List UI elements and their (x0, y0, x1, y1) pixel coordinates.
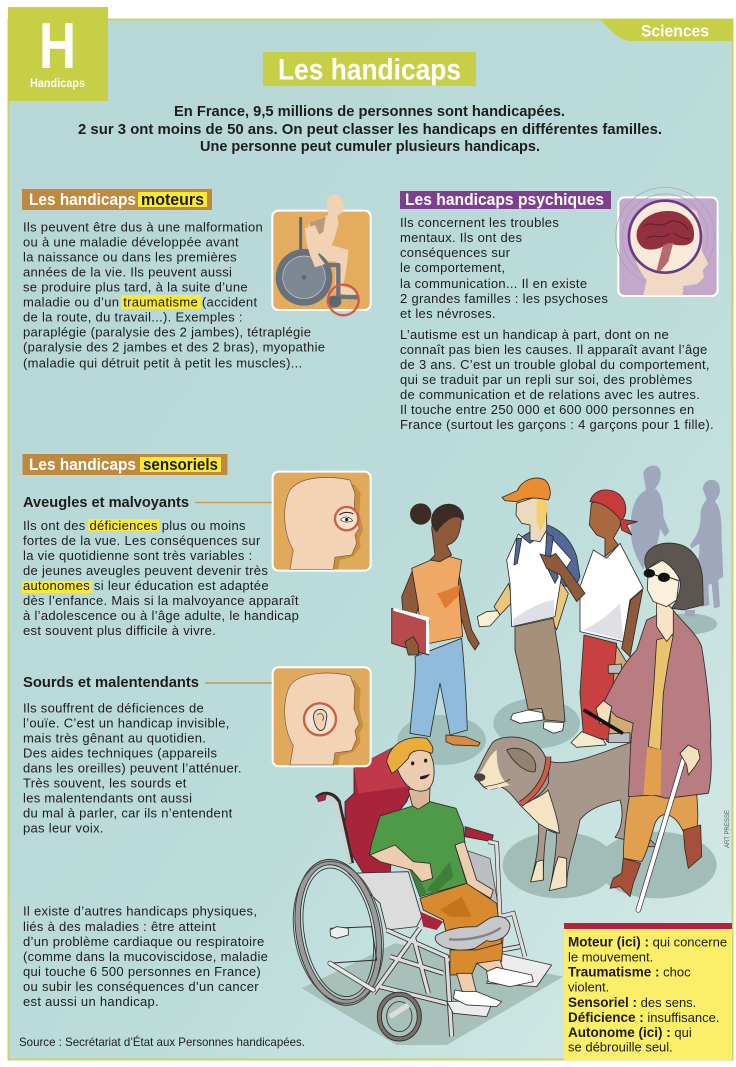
subheading: aveugles et malvoyants: Aveugles et malvoyants (23, 494, 189, 511)
text block: psychiques intro: la communication... Il en existe (400, 276, 587, 291)
text block: moteurs: se produire plus tard, à la suite d’une (23, 280, 248, 294)
text block: moteurs: ou à une maladie développée avant (23, 234, 239, 250)
letter tab: H Handicaps (8, 7, 108, 101)
text block: sourds: Des aides techniques (appareils (23, 746, 217, 760)
text block: aveugles (22, 518, 303, 638)
glossary box: le mouvement. (568, 950, 653, 964)
heading: handicaps psychiques: Les handicaps psychiques (405, 191, 604, 209)
text block: sourds: Très souvent, les sourds et (23, 776, 187, 790)
text block: autisme: qui se traduit par un repli sur soi, des problèmes (400, 372, 693, 387)
person: boy with bandana (540, 490, 643, 747)
text block: sourds: l’ouïe. C’est un handicap invisible, (23, 716, 230, 730)
glossary box: Sensoriel : (568, 995, 637, 1010)
glossary box: Moteur (ici) : (568, 934, 649, 950)
heading: handicaps sensoriels: sensoriels (143, 456, 218, 474)
intro text: Une personne peut cumuler plusieurs handicaps. (200, 138, 540, 155)
text block: autisme: L’autisme est un handicap à part, dont on ne (400, 327, 669, 342)
text block: moteurs: paraplégie (paralysie des 2 jambes), tétraplégie (23, 324, 311, 340)
text block: sourds: Ils souffrent de déficiences de (23, 700, 204, 716)
glossary box: choc (660, 964, 691, 980)
source: Source : Secrétariat d’État aux Personnes handicapées. (19, 1034, 305, 1049)
text block: autisme: France (surtout les garçons : 4 garçons pour 1 fille). (400, 417, 714, 432)
intro text: En France, 9,5 millions de personnes sont handicapées. (174, 103, 565, 120)
person: boy with cap (477, 478, 580, 748)
text block: aveugles: dès l’enfance. Mais si la malvoyance apparaît (23, 593, 299, 608)
text block: aveugles: de jeunes aveugles peuvent devenir très (23, 563, 268, 578)
text block: psychiques intro: mentaux. Ils ont des (400, 230, 523, 245)
heading: handicaps moteurs (22, 189, 212, 210)
text block: moteurs: de la route, du travail...). Exemples : (23, 310, 243, 324)
text block: moteurs: maladie ou d’un traumatisme (accident (23, 294, 257, 310)
text block: psychiques intro: le comportement, (400, 260, 505, 275)
person: girl with book (392, 503, 486, 765)
text block: sourds: dans les oreilles) peuvent l’atténuer. (23, 760, 242, 776)
text block: moteurs: années de la vie. Ils peuvent aussi (23, 264, 232, 280)
text block: aveugles: la vie quotidienne sont très variables : (23, 548, 253, 563)
text block: autisme: Il touche entre 250 000 et 600 000 personnes en (400, 402, 695, 417)
text block: moteurs: (maladie qui détruit petit à petit les muscles)... (23, 356, 302, 370)
section tab: Sciences (600, 19, 733, 41)
frame (373, 928, 552, 1037)
glossary box: qui (671, 1025, 692, 1040)
credit: art presse: ART PRESSE (725, 810, 731, 848)
text block: sourds: les malentendants ont aussi (23, 790, 192, 806)
wheelchair back (317, 747, 525, 957)
glossary box: insuffisance. (644, 1010, 719, 1025)
glossary box: Traumatisme : (568, 964, 660, 980)
heading: handicaps moteurs: Les handicaps (29, 191, 136, 209)
heading: handicaps moteurs: moteurs (141, 191, 204, 209)
intro text: 2 sur 3 ont moins de 50 ans. On peut classer les handicaps en différentes familles. (78, 121, 662, 138)
letter tab: H Handicaps: Handicaps (30, 76, 85, 90)
title: Les handicaps (278, 54, 461, 86)
background silhouettes (631, 465, 723, 635)
text block: autres handicaps: (comme dans la mucoviscidose, maladie (23, 949, 268, 964)
subheading: sourds et malentendants: Sourds et malentendants (23, 674, 199, 691)
text block: aveugles: à l’adolescence ou à l’âge adulte, le handicap (23, 608, 299, 623)
text block: sourds: mais très gênant au quotidien. (23, 730, 206, 746)
text block: aveugles: autonomes si leur éducation est adaptée (23, 578, 269, 593)
boy (369, 738, 533, 1007)
glossary box: se débrouille seul. (568, 1040, 673, 1054)
big wheel (283, 854, 394, 1011)
illustration: guide dog (474, 737, 717, 898)
letter tab: H Handicaps: H (39, 9, 76, 82)
text block: moteurs: Ils peuvent être dus à une malformation (23, 220, 263, 234)
text block: psychiques intro: et les névroses. (400, 306, 496, 321)
text block: autisme: de 3 ans. C’est un trouble global du comportement, (400, 357, 710, 372)
text block: psychiques intro: Ils concernent les troubles (400, 215, 559, 230)
heading: handicaps sensoriels: Les handicaps (29, 456, 136, 474)
small wheel (379, 994, 419, 1039)
text block: moteurs: (paralysie des 2 jambes et des 2 bras), myopathie (23, 340, 325, 354)
text block: psychiques intro: 2 grandes familles : les psychoses (400, 291, 608, 306)
text block: autres handicaps: Il existe d’autres handicaps physiques, (23, 904, 257, 918)
icon: brain in head (616, 187, 718, 296)
icon: head with eye (273, 472, 371, 571)
icon: head with ear (273, 667, 371, 766)
icon: wheelchair user (272, 195, 371, 315)
text block: moteurs: la naissance ou dans les premières (23, 250, 237, 264)
glossary box: qui concerne (649, 934, 727, 950)
glossary box (564, 923, 732, 1060)
text block: aveugles: Ils ont des déficiences plus ou moins (23, 518, 246, 533)
glossary box: violent. (568, 980, 609, 994)
glossary box: des sens. (637, 995, 696, 1010)
heading: handicaps sensoriels (22, 454, 228, 475)
text block: autres handicaps: qui touche 6 500 personnes en France) (23, 964, 261, 979)
text block: autres handicaps: d’un problème cardiaque ou respiratoire (23, 934, 265, 949)
text block: aveugles: est souvent plus difficile à vivre. (23, 623, 216, 638)
floor shadow (302, 943, 563, 1045)
text block: psychiques intro: conséquences sur (400, 245, 511, 260)
text block: aveugles: fortes de la vue. Les conséquences sur (23, 533, 261, 548)
text block: autres handicaps: est aussi un handicap. (23, 994, 159, 1009)
text block: moteurs (23, 220, 329, 370)
illustration: boy in wheelchair (283, 738, 563, 1045)
glossary box: Autonome (ici) : (568, 1025, 671, 1040)
person: blind woman with cane (585, 543, 711, 910)
illustration: crowd (392, 465, 723, 765)
text block: autres handicaps: ou subir les conséquences d’un cancer (23, 979, 259, 994)
text block: sourds: pas leur voix. (23, 820, 104, 836)
text block: autisme: connaît pas bien les causes. Il apparaît avant l’âge (400, 342, 708, 357)
glossary box: Déficience : (568, 1010, 644, 1025)
section tab: Sciences: Sciences (641, 22, 709, 40)
text block: sourds: du mal à parler, car ils n’entendent (23, 806, 233, 820)
text block: autres handicaps: liés à des maladies : être atteint (23, 919, 216, 934)
text block: autisme: de communication et de relations avec les autres. (400, 387, 700, 402)
